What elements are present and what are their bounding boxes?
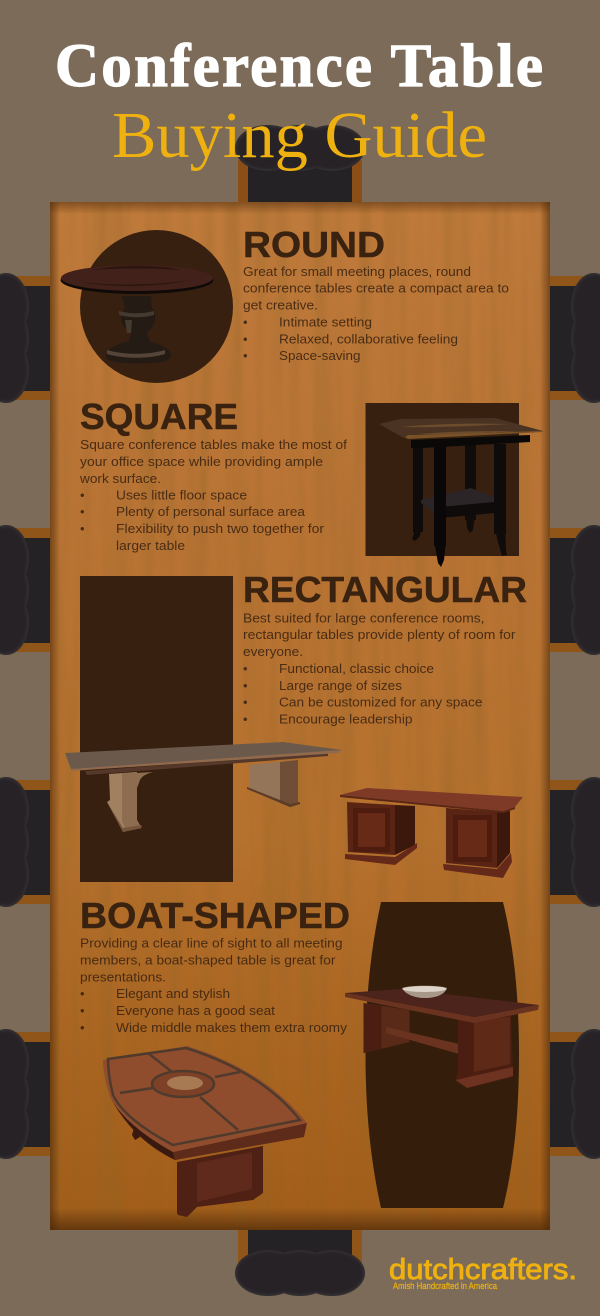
chair: left 4 xyxy=(0,1029,50,1159)
panel: rectangular xyxy=(65,569,527,882)
text: round description: conference tables create a compact area to xyxy=(243,281,509,296)
heading: ROUND: ROUND xyxy=(243,224,385,265)
logo: dutchcrafters: Amish Handcrafted in America xyxy=(393,1281,498,1292)
text: rectangular description xyxy=(243,610,516,726)
text: round description: • xyxy=(243,348,248,363)
text: square description: Square conference tables make the most of xyxy=(80,437,347,452)
text: boat-shaped description: presentations. xyxy=(80,970,166,984)
photo: round pedestal table xyxy=(60,265,214,364)
photo: square table xyxy=(379,418,543,567)
photo: trestle rectangular table xyxy=(65,742,342,832)
chair: top xyxy=(235,125,365,202)
title: Conference Table xyxy=(55,33,543,100)
panel: boat-shaped xyxy=(80,895,539,1217)
text: boat-shaped description: members, a boat-shaped table is great for xyxy=(80,952,336,968)
text: boat-shaped description xyxy=(80,936,348,1035)
photo: boat table with bowl xyxy=(345,986,539,1088)
dark ellipse backdrop xyxy=(80,230,233,383)
text: round description: • xyxy=(243,314,248,330)
text: rectangular description: • xyxy=(243,712,248,726)
text: square description: larger table xyxy=(116,538,185,553)
chair: left 1 xyxy=(0,273,50,403)
text: round description: Relaxed, collaborative feeling xyxy=(279,331,458,346)
text: rectangular description: rectangular tables provide plenty of room for xyxy=(243,627,516,642)
text: square description: your office space while providing ample xyxy=(80,454,323,469)
text: round description: Intimate setting xyxy=(279,314,372,330)
panel: square xyxy=(79,396,543,567)
panel: round xyxy=(60,224,509,383)
text: rectangular description: everyone. xyxy=(243,644,303,659)
text: boat-shaped description: Providing a clear line of sight to all meeting xyxy=(80,936,342,951)
text: rectangular description: Can be customized for any space xyxy=(279,694,482,710)
logo: dutchcrafters: dutchcrafters. xyxy=(389,1254,577,1286)
chair: right 2 xyxy=(550,525,600,655)
chair: right 4 xyxy=(550,1029,600,1159)
text: boat-shaped description: • xyxy=(80,1020,85,1035)
dark square backdrop xyxy=(366,403,519,556)
text: round description: • xyxy=(243,331,248,346)
photo: boat table with inlay xyxy=(103,1046,307,1217)
text: square description: • xyxy=(80,521,85,536)
title: Buying Guide xyxy=(112,99,487,172)
text: round description: Space-saving xyxy=(279,348,360,363)
text: rectangular description: • xyxy=(243,661,248,676)
text: square description: Uses little floor space xyxy=(116,488,247,502)
text: square description: • xyxy=(80,488,85,502)
text: rectangular description: Functional, classic choice xyxy=(279,661,434,676)
text: boat-shaped description: • xyxy=(80,1003,85,1018)
text: round description xyxy=(243,264,509,363)
chair: left 2 xyxy=(0,525,50,655)
chair: bottom xyxy=(235,1230,365,1296)
text: boat-shaped description: • xyxy=(80,986,85,1001)
text: rectangular description: Encourage leadership xyxy=(279,712,412,726)
text: rectangular description: • xyxy=(243,678,248,693)
text: square description: Plenty of personal surface area xyxy=(116,504,306,519)
text: square description: • xyxy=(80,504,85,519)
title xyxy=(55,33,543,172)
text: round description: Great for small meeting places, round xyxy=(243,264,471,279)
panel: wood tabletop xyxy=(50,202,550,1230)
chair: right 1 xyxy=(550,273,600,403)
text: square description: work surface. xyxy=(79,471,161,486)
photo: double pedestal desk table xyxy=(340,788,523,878)
chair: right 3 xyxy=(550,777,600,907)
text: boat-shaped description: Elegant and stylish xyxy=(116,986,230,1001)
text: rectangular description: • xyxy=(243,694,248,710)
heading: RECTANGULAR: RECTANGULAR xyxy=(243,569,527,610)
heading: SQUARE: SQUARE xyxy=(80,396,238,437)
text: rectangular description: Large range of sizes xyxy=(279,678,403,693)
text: round description: get creative. xyxy=(243,298,318,312)
text: square description xyxy=(79,437,347,553)
text: boat-shaped description: Everyone has a good seat xyxy=(116,1003,275,1018)
dark boat backdrop xyxy=(366,902,519,1208)
text: rectangular description: Best suited for large conference rooms, xyxy=(243,610,484,626)
text: boat-shaped description: Wide middle makes them extra roomy xyxy=(116,1020,348,1035)
text: square description: Flexibility to push two together for xyxy=(116,521,325,536)
heading: BOAT-SHAPED: BOAT-SHAPED xyxy=(80,895,350,936)
chair: left 3 xyxy=(0,777,50,907)
dark rectangle backdrop xyxy=(80,576,233,882)
